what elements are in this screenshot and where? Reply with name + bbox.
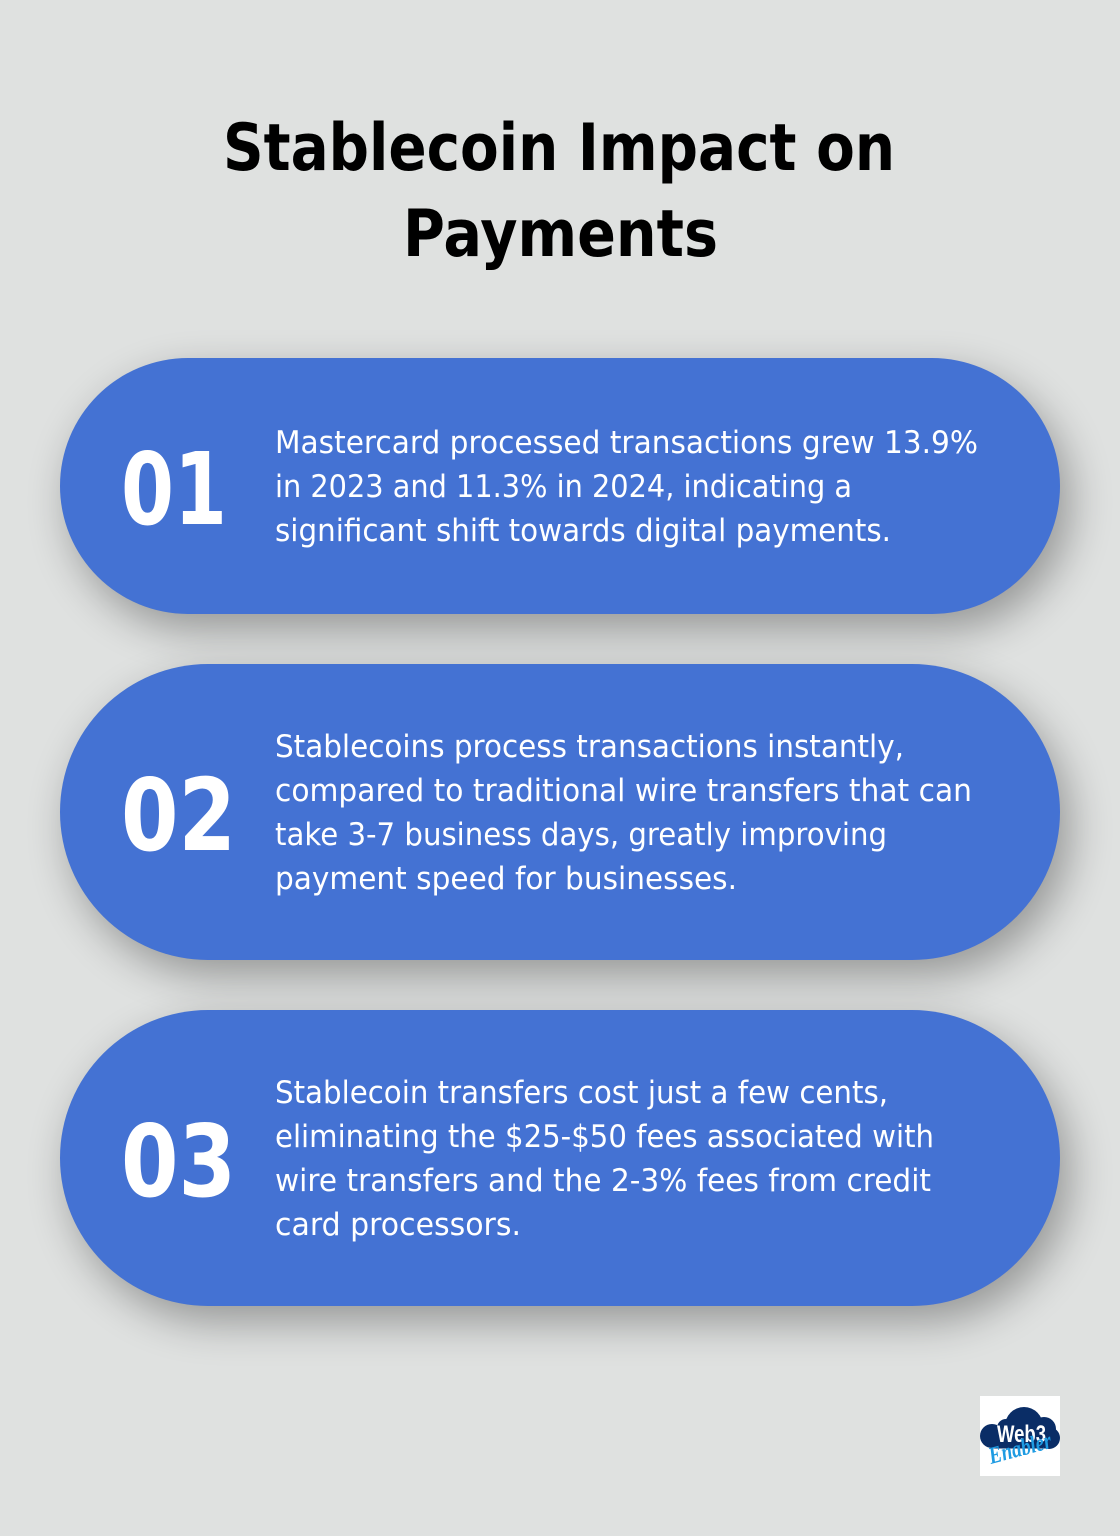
number 03: 03 — [121, 1103, 236, 1220]
title — [223, 111, 895, 272]
logo: Web3 Enabler: Enabler — [985, 1428, 1055, 1470]
text block 2: payment speed for businesses. — [275, 861, 737, 897]
text block 2 — [275, 729, 972, 897]
number 02: 02 — [121, 757, 236, 874]
number 01: 01 — [121, 431, 227, 548]
card 2 background — [60, 664, 1060, 960]
text block 3: eliminating the $25-$50 fees associated with — [275, 1119, 934, 1155]
text block 1 — [275, 425, 978, 549]
text block 1: significant shift towards digital payments. — [275, 513, 891, 549]
text block 3: wire transfers and the 2-3% fees from credit — [275, 1163, 931, 1199]
text block 1: in 2023 and 11.3% in 2024, indicating a — [275, 469, 852, 505]
text block 2: Stablecoins process transactions instantly, — [275, 729, 904, 765]
card 3 background — [60, 1010, 1060, 1306]
text block 3: Stablecoin transfers cost just a few cents, — [275, 1075, 888, 1111]
title: Stablecoin Impact on — [223, 111, 895, 186]
card 1 background — [60, 358, 1060, 614]
logo: Web3 Enabler: Web3 — [997, 1421, 1046, 1448]
text block 2: compared to traditional wire transfers that can — [275, 773, 972, 809]
text block 3: card processors. — [275, 1207, 521, 1243]
logo: Web3 Enabler — [980, 1396, 1060, 1476]
title: Payments — [403, 197, 718, 272]
text block 1: Mastercard processed transactions grew 13.9% — [275, 425, 978, 461]
text block 2: take 3-7 business days, greatly improving — [275, 817, 887, 853]
text block 3 — [275, 1075, 934, 1243]
